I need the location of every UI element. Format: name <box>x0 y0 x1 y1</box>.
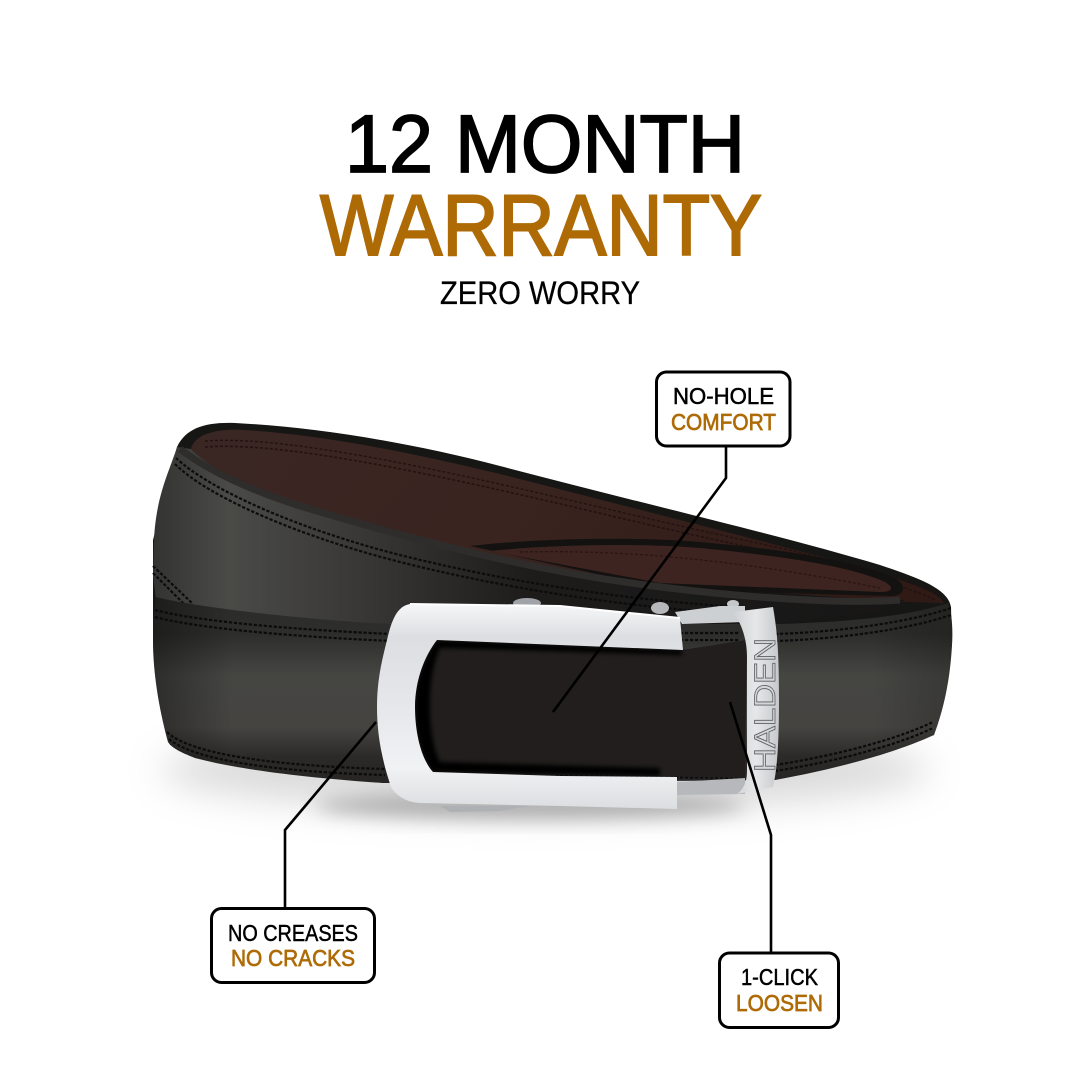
belt ground shadow <box>160 728 930 820</box>
callout: no-hole comfort: NO-HOLE <box>673 383 774 409</box>
callout: no creases no cracks <box>212 908 374 982</box>
buckle interior leather <box>415 640 747 778</box>
callout: no-hole comfort <box>656 372 790 446</box>
callout line: no-hole comfort <box>553 446 726 712</box>
callout: no creases no cracks: NO CREASES <box>228 920 358 946</box>
callout line: no creases <box>285 722 376 908</box>
subheading: zero worry: ZERO WORRY <box>440 275 640 311</box>
buckle rivets <box>513 598 739 614</box>
callout: 1-click loosen <box>720 953 838 1028</box>
title <box>320 99 762 311</box>
callout: 1-click loosen: LOOSEN <box>736 990 823 1016</box>
lower belt band <box>153 597 952 783</box>
inner coil of strap <box>470 539 903 596</box>
buckle frame <box>377 604 683 809</box>
buckle rear bars <box>440 606 745 812</box>
upper belt band <box>153 447 905 632</box>
callout: no creases no cracks: NO CRACKS <box>231 945 355 971</box>
heading: 12 month: 12 MONTH <box>345 99 745 190</box>
upper band stitches <box>153 458 740 614</box>
brown inner lining <box>191 430 944 603</box>
heading: warranty: WARRANTY <box>320 178 762 274</box>
dark belt silhouette <box>153 423 952 783</box>
upper band rim <box>180 449 900 601</box>
lining stitches <box>205 446 935 600</box>
keeper loop with brand <box>733 607 782 794</box>
callout: 1-click loosen: 1-CLICK <box>741 964 819 990</box>
brand text: HALDEN <box>749 638 782 772</box>
belt illustration <box>153 423 952 820</box>
callout line: 1-click <box>730 702 771 952</box>
callout: no-hole comfort: COMFORT <box>671 409 776 435</box>
lower band stitches <box>155 608 951 778</box>
